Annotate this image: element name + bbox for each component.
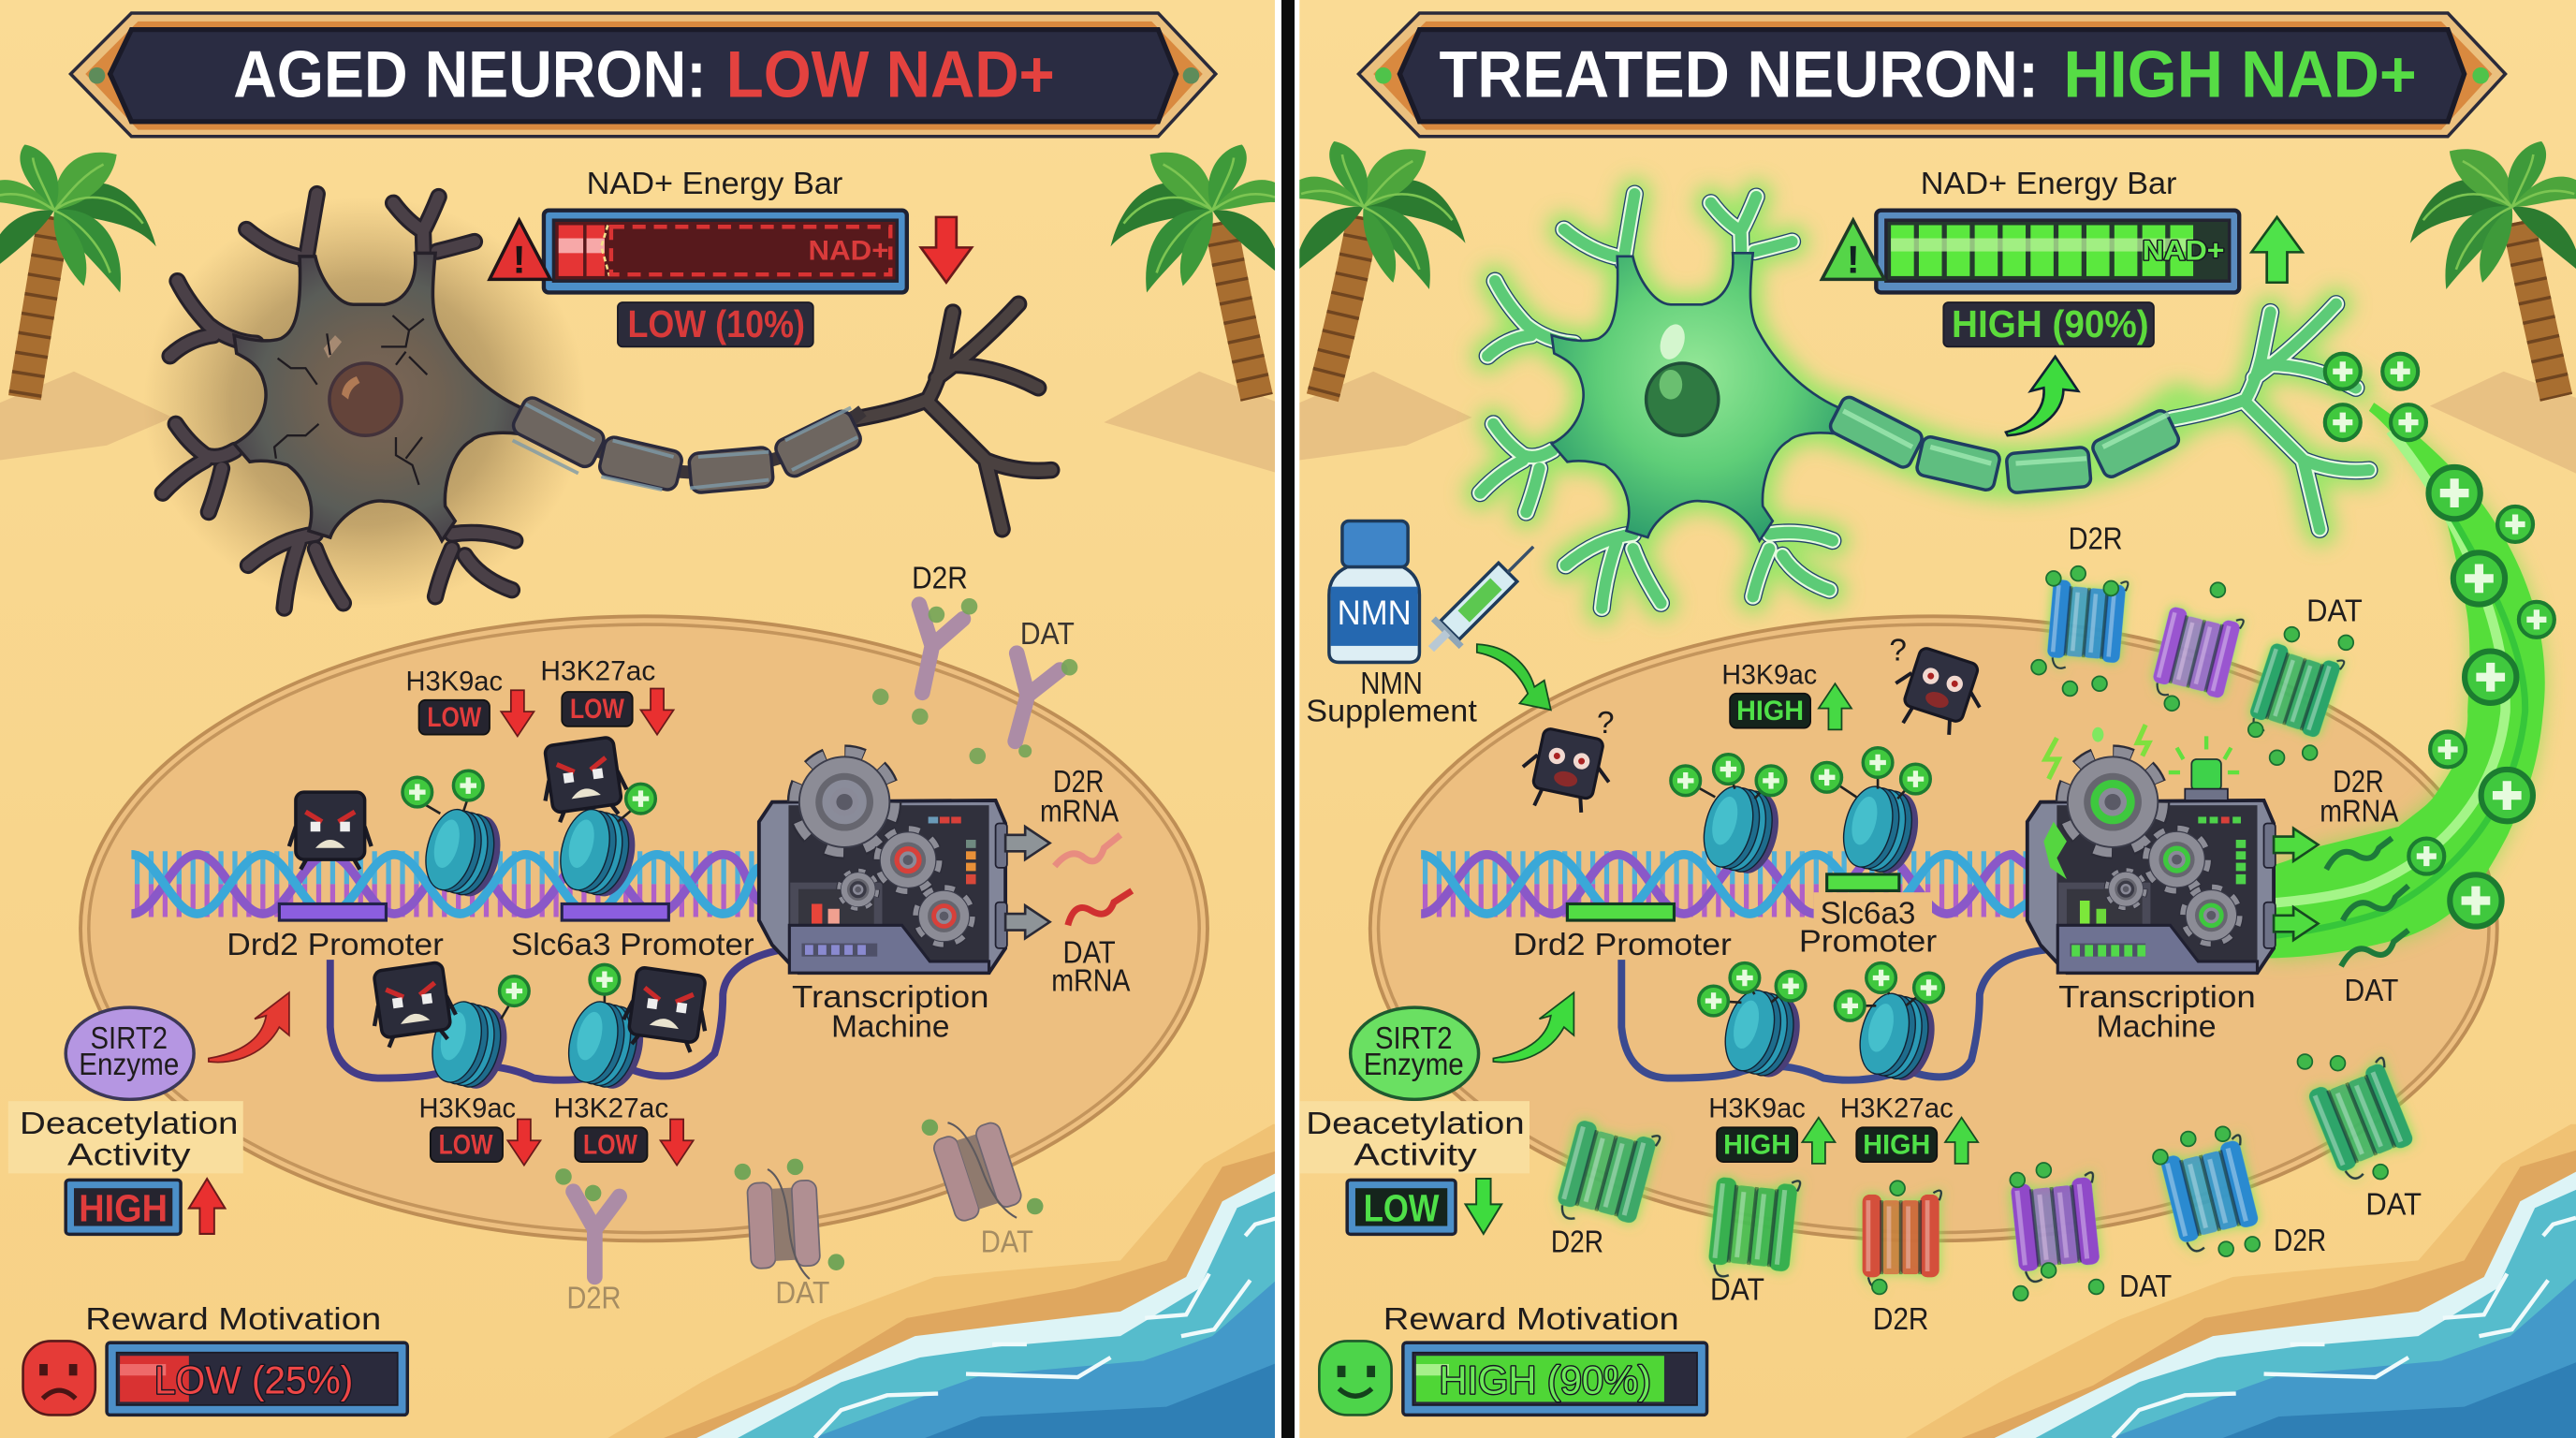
title banner: HIGH NAD+ <box>2063 37 2417 111</box>
palm tree left <box>1281 141 1466 398</box>
NAD+ energy bar high: NAD+ <box>2143 235 2224 266</box>
receptors bottom: D2R <box>1873 1302 1928 1337</box>
NAD+ energy bar high: HIGH (90%) <box>1952 302 2149 345</box>
faded receptors top: D2R <box>912 561 968 595</box>
SIRT2 enzyme: SIRT2 <box>91 1021 168 1056</box>
NAD+ energy bar low <box>490 167 972 346</box>
title banner: AGED NEURON: <box>233 37 707 111</box>
faded receptors top <box>872 561 1077 764</box>
faded receptors bottom <box>555 1108 1043 1315</box>
transcription machine label: Transcription <box>792 980 989 1015</box>
reward motivation meter: HIGH (90%) <box>1439 1358 1651 1402</box>
neuron: dark damaged cell <box>143 194 1051 609</box>
deacetylation activity: Activity <box>67 1138 191 1173</box>
NAD+ green energy stream <box>2264 403 2545 958</box>
mRNA labels and wiggles: mRNA <box>1040 795 1120 829</box>
mRNA labels and wiggles: D2R <box>1053 765 1104 800</box>
receptors top: DAT <box>2306 594 2363 629</box>
acetylated nucleosomes <box>1671 748 1943 1086</box>
NMN bottle: NMN <box>1338 594 1412 632</box>
confused repressor blocks: ? <box>1597 706 1615 741</box>
promoter bars <box>279 903 668 920</box>
NAD+ energy bar high: ! <box>1847 237 1860 281</box>
mRNA labels and wiggles: DAT <box>1063 936 1116 971</box>
receptors bottom: D2R <box>2274 1224 2326 1258</box>
transcription machine label: Machine <box>2097 1010 2217 1045</box>
promoter bars <box>1567 874 1899 920</box>
promoter labels: Drd2 Promoter <box>227 928 444 962</box>
receptors bottom: DAT <box>1710 1273 1764 1308</box>
NMN label: Supplement <box>1306 695 1478 729</box>
faded receptors top: DAT <box>1020 617 1075 652</box>
deacetylation activity <box>8 1101 243 1234</box>
confused repressor blocks: ? <box>1889 634 1907 668</box>
NMN label <box>1306 667 1478 729</box>
arrow: SIRT2 action <box>209 992 289 1063</box>
deacetylation activity: Deacetylation <box>20 1107 238 1141</box>
neuron: healthy glowing cell <box>1480 194 2369 609</box>
promoter labels: Drd2 Promoter <box>1513 928 1732 962</box>
deacetylation activity: HIGH <box>79 1186 168 1229</box>
arrow: SIRT2 action <box>1493 992 1573 1063</box>
histone marks bottom <box>1708 1093 1978 1164</box>
transcription machine label <box>792 980 989 1045</box>
reward motivation meter: Reward Motivation <box>1383 1302 1679 1337</box>
panel: aged neuron <box>0 13 1295 1438</box>
palm tree right <box>2410 141 2576 398</box>
transcription machine active <box>2027 725 2276 973</box>
histone marks bottom: LOW <box>439 1129 493 1160</box>
mRNA labels and wiggles: mRNA <box>1051 964 1131 999</box>
mRNA labels and wiggles <box>2320 765 2408 1008</box>
histone marks bottom: H3K27ac <box>1840 1093 1954 1124</box>
NAD+ energy bar low: NAD+ Energy Bar <box>587 167 842 201</box>
syringe <box>1417 533 1547 663</box>
DNA double helix <box>1421 855 2030 914</box>
histone marks bottom: H3K27ac <box>553 1093 668 1124</box>
gap under raised Slc6a3 promoter <box>1814 892 1932 925</box>
SIRT2 enzyme <box>1351 1007 1479 1099</box>
receptors bottom: DAT <box>2119 1269 2172 1304</box>
histone marks top <box>1721 659 1852 729</box>
receptors bottom: D2R <box>1551 1225 1603 1260</box>
NAD+ plus particles <box>2325 354 2554 927</box>
deacetylation activity <box>1299 1101 1530 1234</box>
sand dunes <box>0 372 1278 474</box>
histone marks top: LOW <box>570 694 625 725</box>
output arrows <box>1005 827 1050 938</box>
histone marks bottom: HIGH <box>1723 1129 1791 1160</box>
reward motivation meter: Reward Motivation <box>85 1302 381 1337</box>
promoter labels: Slc6a3 <box>1821 897 1915 932</box>
SIRT2 enzyme: Enzyme <box>79 1048 179 1082</box>
transcription machine label: Transcription <box>2058 980 2256 1015</box>
deacetylation activity: LOW <box>1364 1186 1440 1229</box>
DNA loop strand <box>330 950 781 1080</box>
mRNA labels and wiggles <box>1040 765 1132 999</box>
histone marks top <box>406 656 674 736</box>
title banner: TREATED NEURON: <box>1439 37 2039 111</box>
ocean corner <box>607 1124 1278 1438</box>
palm tree left <box>0 144 156 398</box>
SIRT2 enzyme <box>66 1007 194 1099</box>
histone marks top: H3K9ac <box>406 666 503 697</box>
panel: treated neuron <box>1281 13 2576 1438</box>
receptors bottom <box>1551 1054 2422 1337</box>
receptors bottom: DAT <box>2365 1187 2422 1222</box>
reward motivation meter <box>1319 1302 1707 1415</box>
palm tree right <box>1110 144 1295 398</box>
sand dunes <box>1299 372 2576 474</box>
promoter labels <box>1513 897 1937 962</box>
histone marks top: HIGH <box>1736 696 1804 726</box>
DNA loop strand <box>1621 950 2045 1080</box>
faded receptors bottom: D2R <box>567 1281 621 1315</box>
reward motivation meter: LOW (25%) <box>154 1358 353 1402</box>
ocean corner <box>1906 1124 2576 1438</box>
mRNA labels and wiggles: DAT <box>2345 974 2398 1008</box>
histone marks top: H3K27ac <box>540 656 655 687</box>
NAD+ energy bar low: ! <box>513 237 526 281</box>
transcription machine <box>759 754 1007 973</box>
NAD+ energy bar high <box>1822 167 2303 346</box>
NMN label: NMN <box>1360 667 1423 701</box>
NAD+ energy bar high: NAD+ Energy Bar <box>1921 167 2177 201</box>
green arrow to nucleus <box>1477 644 1551 710</box>
DNA double helix <box>131 855 759 914</box>
reward motivation meter <box>23 1302 407 1415</box>
NMN bottle <box>1329 521 1419 662</box>
title banner <box>70 13 1216 137</box>
mRNA labels and wiggles: D2R <box>2333 765 2384 800</box>
faded receptors bottom: DAT <box>981 1225 1033 1260</box>
confused repressor blocks <box>1515 634 1992 820</box>
histone marks top: LOW <box>427 702 482 733</box>
histone marks bottom: H3K9ac <box>1708 1093 1806 1124</box>
histone marks bottom: LOW <box>583 1129 638 1160</box>
SIRT2 enzyme: SIRT2 <box>1375 1021 1453 1056</box>
SIRT2 enzyme: Enzyme <box>1364 1048 1464 1082</box>
faded receptors bottom: DAT <box>775 1276 829 1311</box>
promoter labels: Promoter <box>1799 924 1937 959</box>
nucleosomes with repressor blocks <box>289 736 712 1093</box>
deacetylation activity: Activity <box>1354 1138 1477 1173</box>
title banner: LOW NAD+ <box>726 37 1055 111</box>
promoter labels <box>229 932 754 955</box>
output arrows <box>2274 829 2318 940</box>
curved arrow up to energy bar <box>2006 357 2078 435</box>
histone marks bottom: HIGH <box>1863 1129 1930 1160</box>
NAD+ energy bar low: LOW (10%) <box>627 302 805 345</box>
mRNA labels and wiggles: mRNA <box>2320 795 2399 829</box>
cell nucleus ellipse <box>80 616 1208 1240</box>
nucleus ellipse <box>1370 616 2497 1240</box>
transcription machine label <box>2058 980 2256 1045</box>
histone marks top: H3K9ac <box>1721 659 1817 690</box>
receptors top <box>2031 521 2363 765</box>
histone marks bottom: H3K9ac <box>419 1093 516 1124</box>
NAD+ energy bar low: NAD+ <box>809 235 889 266</box>
deacetylation activity: Deacetylation <box>1306 1107 1525 1141</box>
title banner <box>1358 13 2506 137</box>
transcription machine label: Machine <box>831 1010 949 1045</box>
histone marks bottom <box>419 1093 694 1166</box>
receptors top: D2R <box>2069 521 2123 556</box>
promoter labels: Slc6a3 Promoter <box>511 928 754 962</box>
